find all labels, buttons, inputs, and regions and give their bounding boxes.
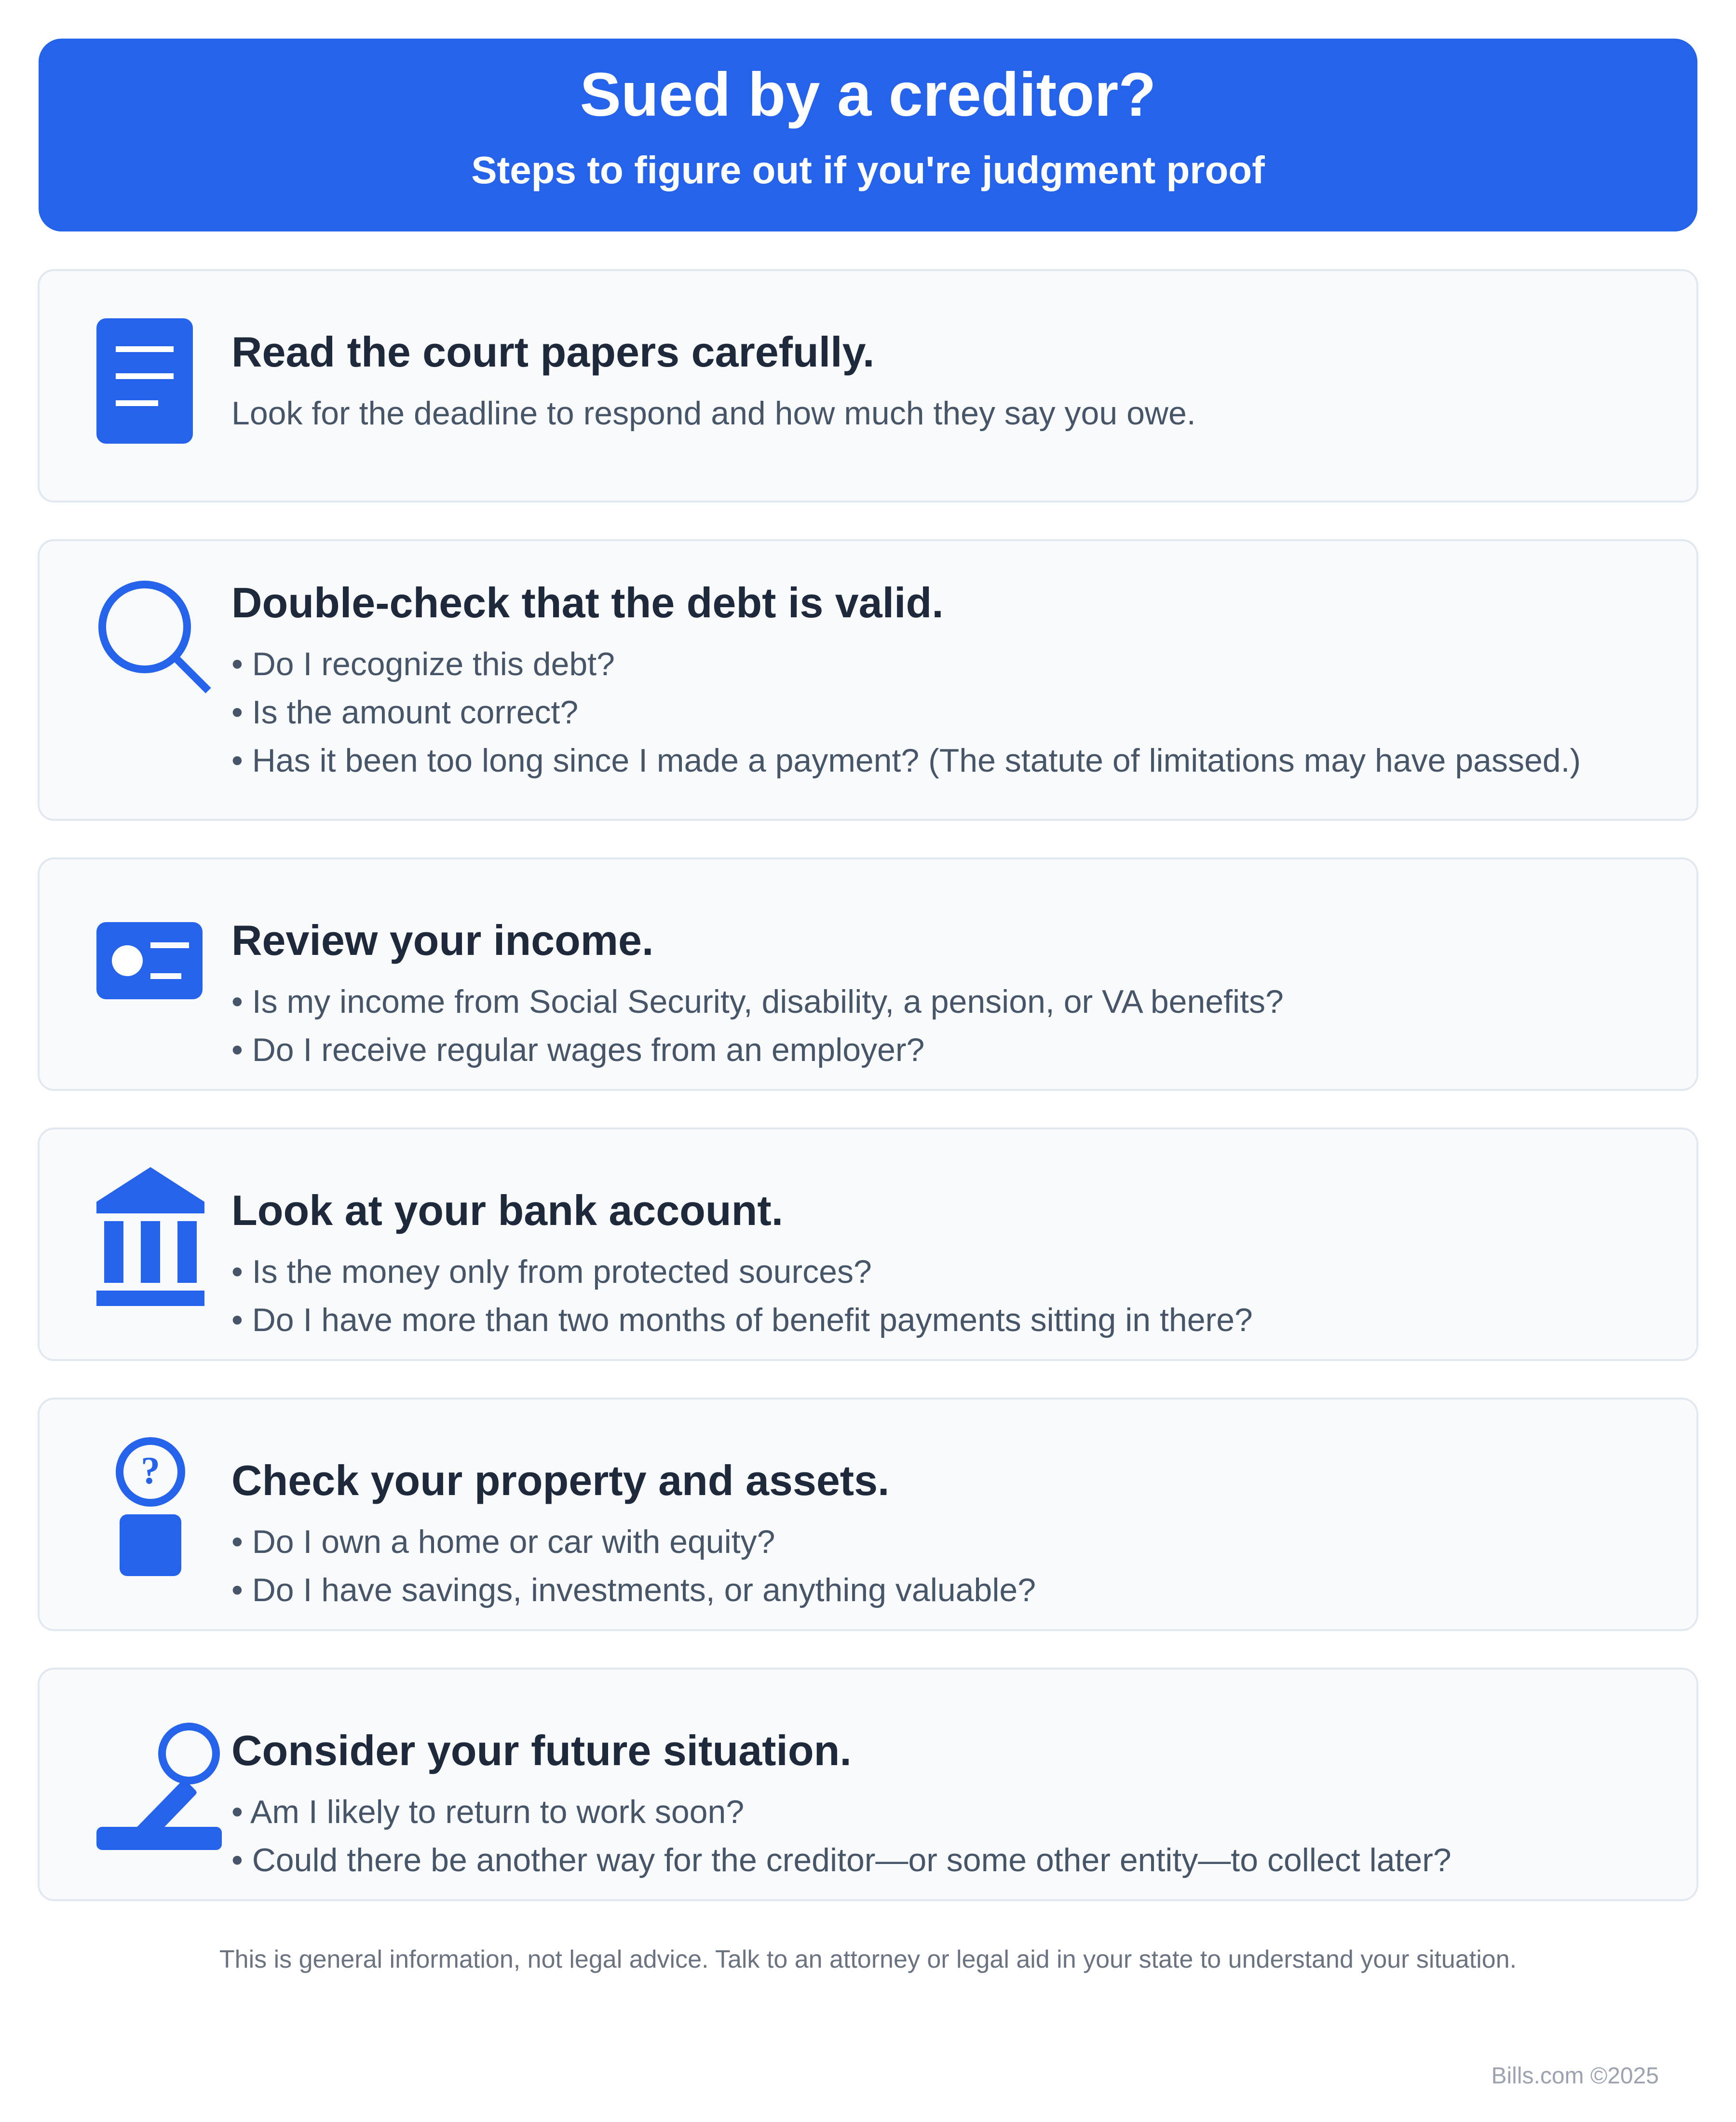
list: step 2 questions: • Has it been too long since I made a payment? (The statute of limitations may have passed.) <box>231 742 1581 779</box>
panel: bank account <box>39 1129 1697 1360</box>
icon: id card <box>96 922 203 999</box>
list: step 6 questions: • Could there be another way for the creditor—or some other entity—to collect later? <box>231 1842 1451 1878</box>
heading: step 5: Check your property and assets. <box>231 1456 889 1504</box>
panel: review income <box>39 858 1697 1090</box>
list: step 4 questions <box>231 1253 1253 1338</box>
disclaimer: This is general information, not legal advice. Talk to an attorney or legal aid in your state to understand your situation. <box>219 1945 1517 1973</box>
icon: question mark over box: ? <box>141 1450 160 1492</box>
list: step 3 questions: • Do I receive regular wages from an employer? <box>231 1032 924 1068</box>
panel: future situation <box>39 1669 1697 1900</box>
list: step 4 questions: • Is the money only from protected sources? <box>231 1253 872 1290</box>
subtitle: Steps to figure out if you're judgment proof <box>471 149 1265 191</box>
panel: double-check debt <box>39 540 1697 820</box>
header banner <box>39 39 1697 231</box>
heading: step 4: Look at your bank account. <box>231 1186 783 1234</box>
list: step 5 questions: • Do I own a home or car with equity? <box>231 1523 775 1560</box>
list: step 2 questions: • Is the amount correct? <box>231 694 578 731</box>
heading: step 3: Review your income. <box>231 916 653 964</box>
heading: step 2: Double-check that the debt is valid. <box>231 579 944 626</box>
list: step 6 questions: • Am I likely to return to work soon? <box>231 1794 744 1830</box>
heading: step 6: Consider your future situation. <box>231 1727 852 1774</box>
list: step 3 questions: • Is my income from Social Security, disability, a pension, or VA benefits? <box>231 983 1284 1020</box>
list: step 5 questions: • Do I have savings, investments, or anything valuable? <box>231 1572 1036 1608</box>
icon: document <box>96 318 193 444</box>
panel: read the court papers <box>39 270 1697 502</box>
list: step 6 questions <box>231 1794 1451 1878</box>
text: step 1 body: Look for the deadline to respond and how much they say you owe. <box>231 395 1196 432</box>
credit: Bills.com ©2025 <box>1491 2063 1659 2089</box>
title: Sued by a creditor? <box>580 60 1156 129</box>
heading: step 1: Read the court papers carefully. <box>231 328 874 376</box>
list: step 2 questions: • Do I recognize this debt? <box>231 646 615 682</box>
icon: magnifying glass <box>102 585 208 691</box>
icon: bank <box>96 1167 204 1306</box>
list: step 5 questions <box>231 1523 1036 1608</box>
list: step 4 questions: • Do I have more than two months of benefit payments sitting in there? <box>231 1302 1253 1338</box>
panel: property and assets <box>39 1399 1697 1630</box>
list: step 2 questions <box>231 646 1581 779</box>
icon: gavel and magnifier <box>96 1727 222 1850</box>
list: step 3 questions <box>231 983 1284 1068</box>
icon: question mark over box <box>120 1441 181 1576</box>
